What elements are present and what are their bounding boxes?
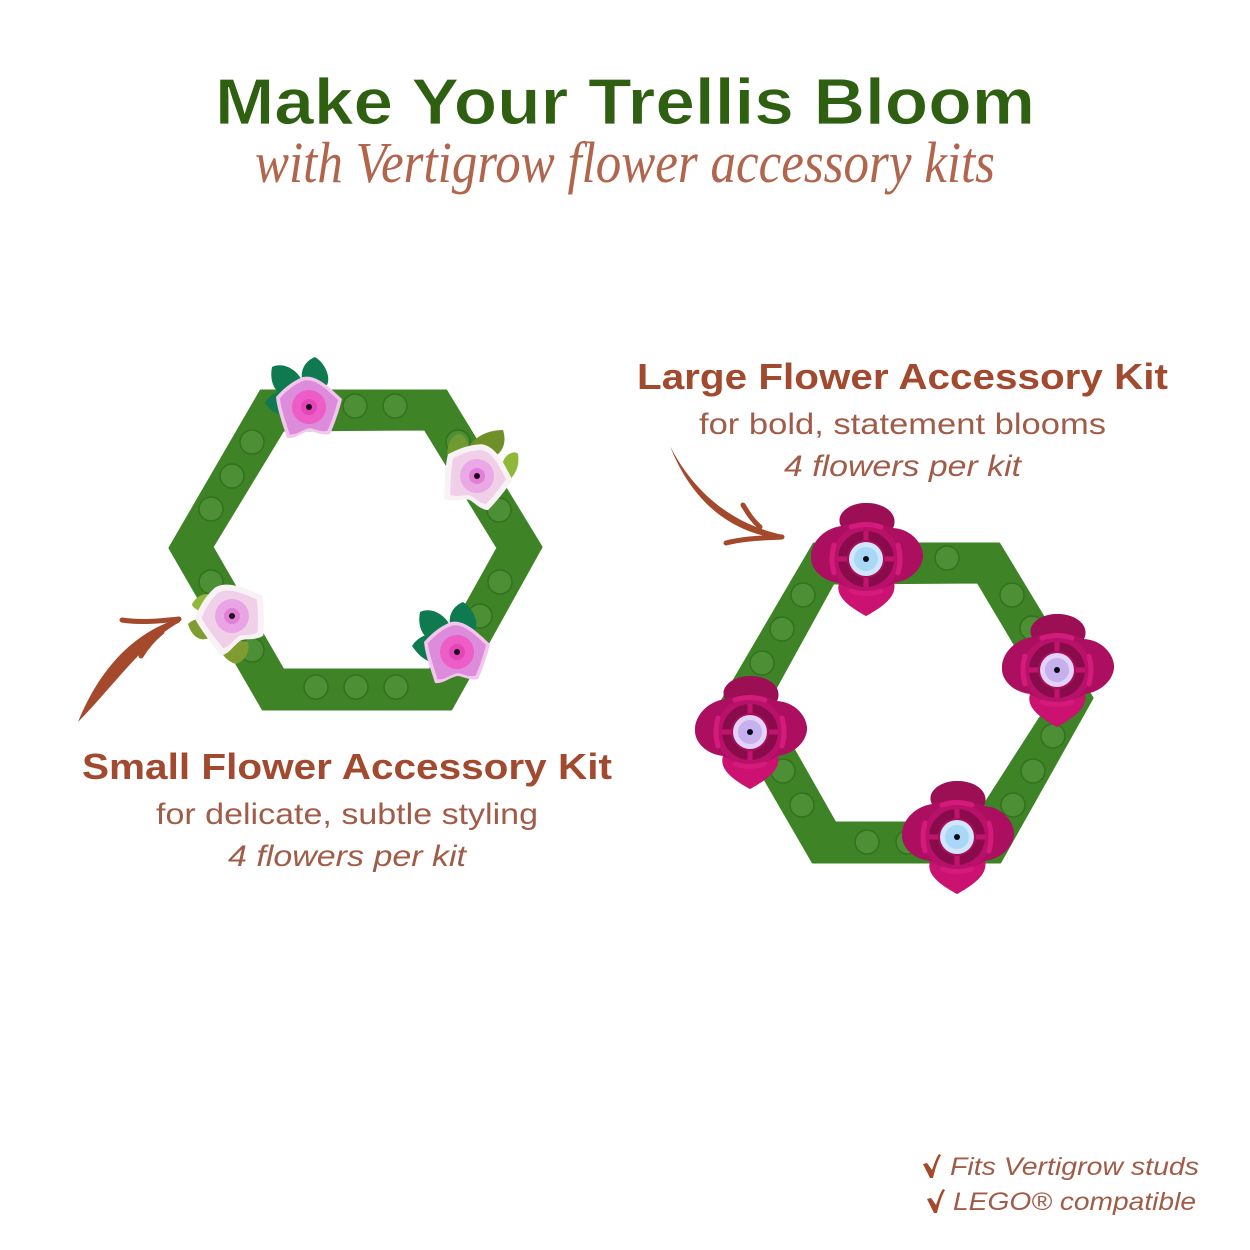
large kit heading: Large Flower Accessory Kit (637, 356, 1168, 397)
arrow: to small flower (78, 618, 180, 722)
flower: small pink top (265, 357, 342, 438)
hexagon frame: small kit (170, 391, 541, 709)
studs: small kit (199, 394, 512, 699)
large kit label (637, 356, 1168, 483)
small kit label (82, 746, 612, 873)
flower: large right (1002, 614, 1114, 727)
large kit count: 4 flowers per kit (784, 450, 1023, 483)
subtitle script: with Vertigrow flower accessory kits (255, 130, 995, 195)
note: LEGO: LEGO® compatible (953, 1188, 1196, 1216)
flower: small pale left (187, 573, 277, 664)
large trellis with flowers (695, 503, 1114, 894)
flower: large left (695, 676, 807, 789)
small trellis with flowers (170, 357, 541, 709)
title: Make Your Trellis Bloom (215, 65, 1035, 138)
flower: small pale right (433, 430, 520, 519)
small kit description: for delicate, subtle styling (156, 798, 538, 831)
icon: check 1 (923, 1154, 941, 1178)
flower: large bottom (902, 781, 1014, 894)
studs: large kit (750, 546, 1065, 854)
small kit heading: Small Flower Accessory Kit (82, 746, 612, 787)
note: studs: Fits Vertigrow studs (950, 1153, 1199, 1181)
small kit count: 4 flowers per kit (228, 840, 468, 873)
large kit description: for bold, statement blooms (699, 408, 1106, 441)
flower: small pink right (412, 602, 490, 683)
flower: large top (811, 503, 923, 616)
compatibility notes (923, 1153, 1199, 1216)
arrow: to large flower (670, 446, 783, 543)
hexagon frame: large kit (721, 544, 1092, 862)
icon: check 2 (927, 1189, 945, 1213)
